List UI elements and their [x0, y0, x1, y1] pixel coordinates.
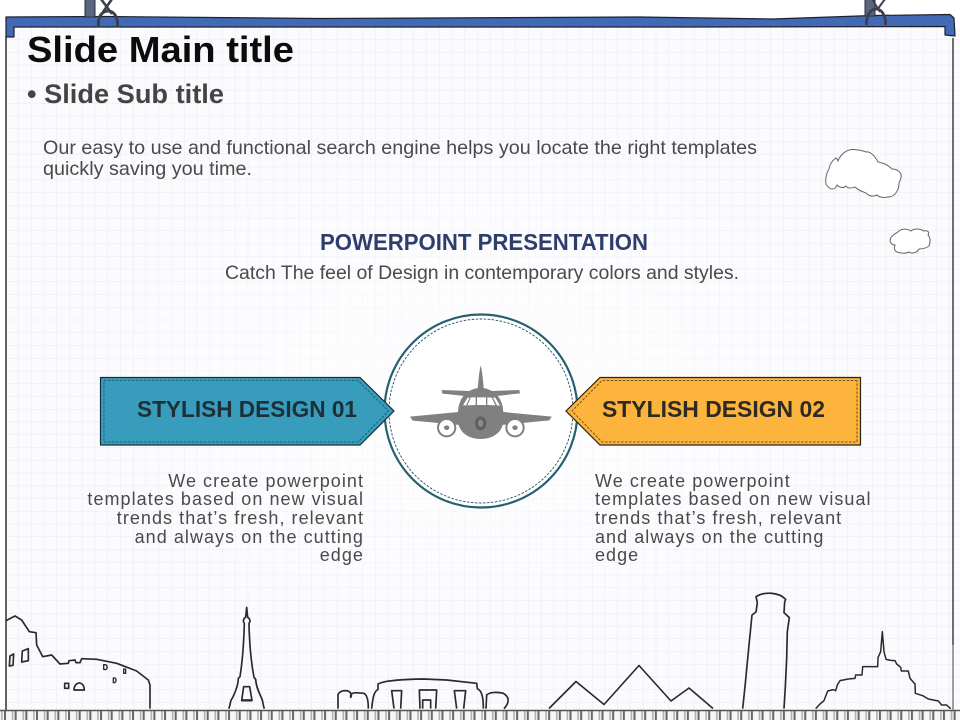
- right description: [595, 471, 872, 565]
- skyline: stonehenge: [338, 679, 508, 709]
- skyline: mont saint-michel: [816, 632, 951, 709]
- icon: large cloud: [826, 149, 901, 197]
- ground rail strip: [0, 710, 960, 720]
- left arrow label: STYLISH DESIGN 01: [137, 396, 357, 422]
- icon: airplane: [410, 366, 552, 439]
- right description: templates based on new visual: [595, 489, 872, 509]
- left description: edge: [320, 545, 364, 565]
- section tagline: Catch The feel of Design in contemporary colors and styles.: [225, 263, 739, 284]
- right description: edge: [595, 545, 639, 565]
- icon: small cloud: [890, 229, 930, 253]
- intro text block: quickly saving you time.: [43, 158, 252, 180]
- blue top binding band: [6, 14, 955, 37]
- right arrow label: [566, 378, 860, 445]
- intro text block: Our easy to use and functional search engine helps you locate the right templates: [43, 137, 757, 159]
- skyline: leaning tower of pisa: [743, 593, 789, 709]
- right hanging strap and chain: [865, 0, 886, 25]
- right description: and always on the cutting: [595, 527, 824, 547]
- left description: templates based on new visual: [87, 489, 364, 509]
- left description: trends that’s fresh, relevant: [117, 508, 364, 528]
- intro text block: [43, 137, 757, 180]
- left description: and always on the cutting: [135, 527, 364, 547]
- subtitle: • Slide Sub title: [27, 79, 224, 109]
- skyline: colosseum: [6, 616, 150, 709]
- right description: trends that’s fresh, relevant: [595, 508, 842, 528]
- right description: We create powerpoint: [595, 471, 791, 491]
- left description: We create powerpoint: [168, 471, 364, 491]
- left arrow label: [100, 378, 394, 445]
- skyline: pyramids: [549, 666, 713, 708]
- left hanging strap and chain: [85, 0, 118, 26]
- title: Slide Main title: [27, 29, 294, 70]
- right arrow label: STYLISH DESIGN 02: [602, 396, 825, 422]
- center circle badge: [384, 314, 578, 508]
- left description: [87, 471, 364, 565]
- section heading: POWERPOINT PRESENTATION: [320, 229, 648, 255]
- skyline: eiffel tower: [229, 607, 264, 709]
